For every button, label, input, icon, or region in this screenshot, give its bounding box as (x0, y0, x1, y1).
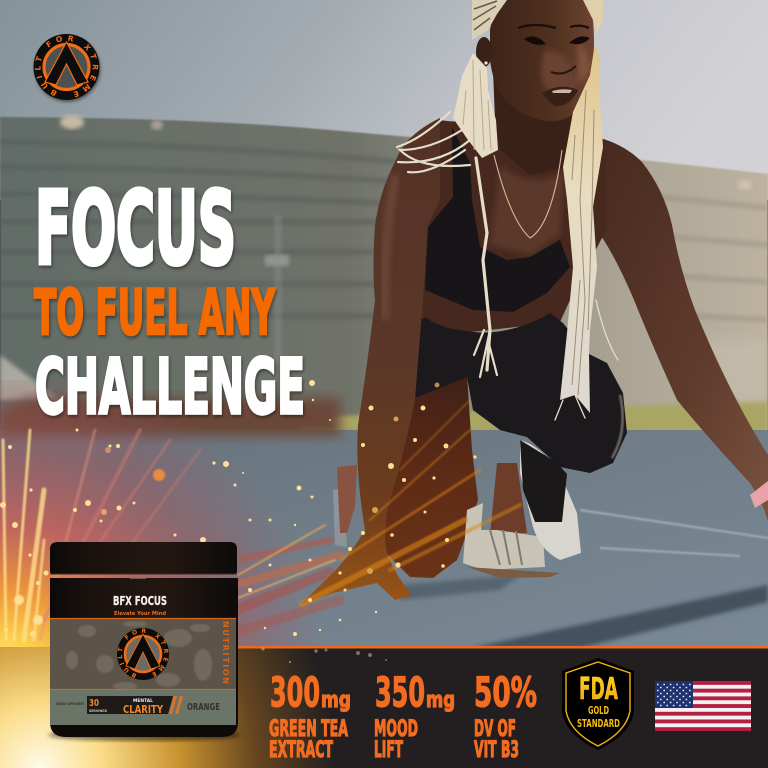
wristband (750, 481, 768, 508)
stat: 300mg green tea extract: 300 (270, 668, 320, 716)
athlete (300, 0, 768, 605)
stat: 300mg green tea extract: GREEN TEA (269, 717, 348, 742)
stat: 300mg green tea extract (269, 668, 351, 763)
stat: 50% dv of vit b3 (474, 668, 537, 763)
front leg lit by sparks (385, 375, 478, 578)
badge: FDA gold standard (562, 658, 634, 750)
sports top (425, 127, 570, 312)
camo label (50, 618, 236, 690)
headline: TO FUEL ANY: TO FUEL ANY (34, 276, 276, 349)
vertical NUTRITION: NUTRITION (221, 621, 230, 684)
necklace (494, 150, 562, 238)
badge: FDA gold standard: GOLD (588, 704, 609, 717)
stat: 50% dv of vit b3: VIT B3 (474, 738, 519, 763)
badge: FDA gold standard: STANDARD (577, 717, 620, 730)
starting blocks (490, 463, 527, 535)
golden rays across the leg (302, 400, 520, 604)
icon: US flag (655, 681, 751, 731)
logo ring text: BUILT FOR XTREME (34, 35, 98, 98)
lower label (50, 690, 236, 725)
logo: built for xtreme (32, 34, 102, 104)
headline: FOCUS: FOCUS (35, 170, 236, 287)
clarity badge: CLARITY (123, 703, 164, 716)
back arm (597, 138, 768, 522)
leggings (405, 313, 627, 473)
clarity badge (87, 696, 183, 716)
stat: 50% dv of vit b3: 50% (474, 668, 537, 716)
jar name: BFX FOCUS (113, 593, 167, 608)
flavour: ORANGE (187, 702, 220, 713)
stat: 300mg green tea extract: EXTRACT (269, 738, 333, 763)
neck and head (493, 60, 595, 175)
bottom bar (0, 646, 768, 768)
stat: 300mg green tea extract: mg (321, 688, 351, 713)
shoe (520, 440, 581, 560)
clarity badge: MENTAL (133, 698, 153, 703)
badge: FDA gold standard: FDA (579, 672, 618, 707)
stat: 350mg mood lift (374, 668, 455, 763)
headline (34, 170, 305, 431)
white braids (397, 43, 618, 420)
jar logo: BUILT FOR XTREME (118, 628, 168, 678)
torso skin (415, 90, 606, 333)
sparks (0, 367, 477, 637)
lid (50, 542, 237, 574)
hair wrap (472, 0, 507, 40)
clarity badge: SERVINGS (89, 709, 107, 713)
stat: 350mg mood lift: mg (426, 688, 455, 713)
stat: 350mg mood lift: 350 (375, 668, 425, 716)
fire burst behind the jar (0, 380, 346, 647)
front arm (300, 118, 440, 605)
leggings behind arm (395, 310, 440, 420)
supplement note: DIETARY SUPPLEMENT (56, 702, 85, 706)
rays to the right of the jar (236, 525, 340, 632)
headline: CHALLENGE: CHALLENGE (35, 342, 305, 431)
stat: 50% dv of vit b3: DV OF (474, 717, 516, 742)
jar body (50, 580, 238, 737)
product jar (46, 542, 240, 742)
stat: 350mg mood lift: LIFT (374, 738, 403, 763)
clarity badge: 30 (89, 698, 99, 709)
stat: 350mg mood lift: MOOD (374, 717, 418, 742)
jar tagline: Elevate Your Mind (114, 611, 166, 617)
